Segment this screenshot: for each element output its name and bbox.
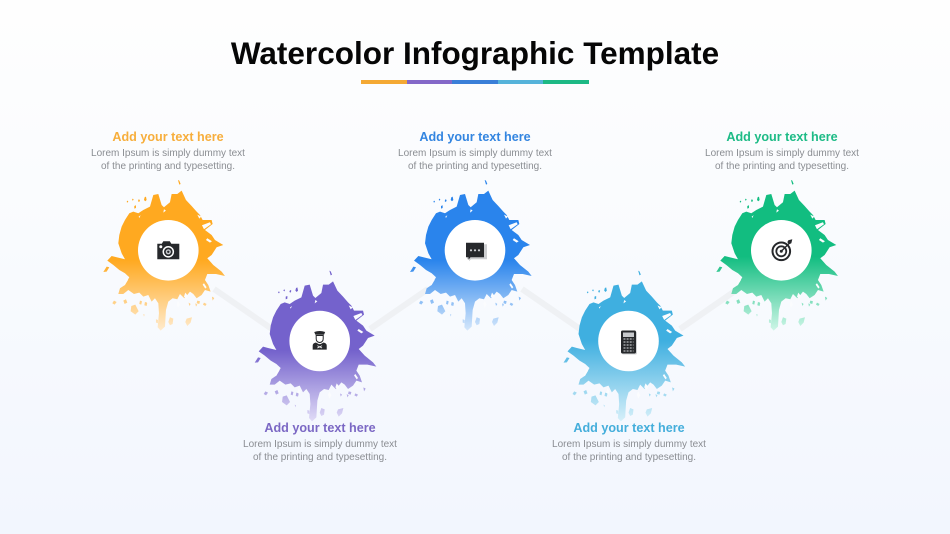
text block: step 1	[91, 130, 245, 172]
text block: step 4: of the printing and typesetting.	[562, 452, 696, 463]
text block: step 5	[705, 130, 859, 172]
text block: step 3: Lorem Ipsum is simply dummy text	[398, 148, 552, 159]
step 3: blue splash with chat icon	[410, 180, 532, 331]
step 2: purple splash with officer icon	[255, 271, 376, 421]
text block: step 5: of the printing and typesetting.	[715, 161, 849, 172]
text block: step 4: Lorem Ipsum is simply dummy text	[552, 439, 706, 450]
step 1: orange splash with camera icon	[103, 180, 225, 331]
text block: step 5: Lorem Ipsum is simply dummy text	[705, 148, 859, 159]
text block: step 4: Add your text here	[573, 421, 685, 435]
text block: step 4	[552, 421, 706, 463]
text block: step 3: Add your text here	[419, 130, 531, 144]
icon: chat bubble	[466, 243, 487, 261]
title: Watercolor Infographic Template	[231, 35, 719, 71]
text block: step 2: Lorem Ipsum is simply dummy text	[243, 439, 397, 450]
text block: step 1: Add your text here	[112, 130, 224, 144]
title underline	[361, 80, 589, 84]
icon: calculator	[621, 330, 637, 354]
text block: step 2: of the printing and typesetting.	[253, 452, 387, 463]
text block: step 2	[243, 421, 397, 463]
icon: target	[772, 239, 792, 260]
text block: step 5: Add your text here	[726, 130, 838, 144]
step 4: light blue splash with calculator icon	[564, 271, 685, 421]
icon: camera	[157, 241, 179, 259]
text block: step 1: Lorem Ipsum is simply dummy text	[91, 148, 245, 159]
text block: step 3: of the printing and typesetting.	[408, 161, 542, 172]
connector lines	[214, 289, 735, 329]
text block: step 2: Add your text here	[264, 421, 376, 435]
step 5: green splash with target icon	[716, 180, 838, 331]
text block: step 1: of the printing and typesetting.	[101, 161, 235, 172]
icon: officer	[313, 331, 327, 350]
text block: step 3	[398, 130, 552, 172]
